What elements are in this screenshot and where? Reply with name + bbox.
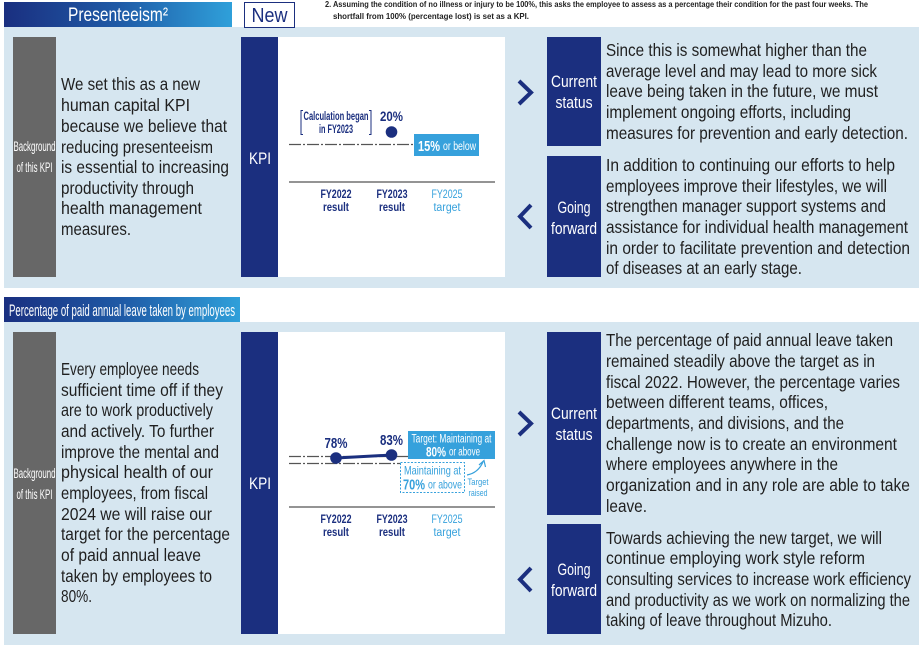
chart: paid leave KPI: FY2022: [320, 514, 352, 526]
text: going forward: [606, 528, 911, 630]
text: background: employees, from fiscal: [61, 483, 208, 503]
chart: paid leave KPI: FY2025: [432, 514, 462, 526]
text: background: 80%.: [61, 586, 92, 606]
heading: paid annual leave: [4, 297, 240, 322]
text: current status: between different teams, offices,: [606, 392, 828, 412]
text: background: productivity through: [61, 178, 194, 198]
chart: presenteeism KPI: result: [379, 202, 405, 214]
chart: paid leave KPI: FY2023: [376, 514, 408, 526]
previous target box: 70%: Maintaining at: [404, 464, 462, 478]
previous target box: 70%: or above: [428, 478, 462, 492]
label: current status: [547, 332, 601, 515]
footnote: [325, 0, 868, 21]
text: background: [61, 359, 230, 606]
text: going forward: In addition to continuing our efforts to help: [606, 155, 895, 175]
label: background of this KPI: [13, 332, 56, 634]
label: going forward: Going: [558, 560, 590, 579]
text: background: 2024 we will raise our: [61, 504, 212, 524]
previous target box: 70%: 70%: [403, 476, 425, 494]
label: going forward: [547, 524, 601, 634]
text: background: reducing presenteeism: [61, 137, 213, 157]
text: current status: implement ongoing efforts, including: [606, 102, 851, 122]
chart: paid leave KPI: result: [379, 527, 405, 539]
target raised note: raised: [468, 488, 488, 499]
text: background: is essential to increasing: [61, 157, 229, 177]
text: current status: leave being taken in the future, we must: [606, 81, 878, 101]
target box: 80%: or above: [449, 446, 480, 458]
label: going forward: [547, 156, 601, 277]
target box: 80%: [408, 431, 495, 460]
label: going forward: forward: [551, 581, 597, 600]
chart: paid leave KPI: 78%: [324, 436, 348, 452]
text: background: because we believe that: [61, 116, 227, 136]
label: going forward: forward: [551, 219, 597, 238]
text: current status: where employees anywhere in the: [605, 454, 838, 474]
label: background of this KPI: [13, 37, 56, 277]
arrow: left: [520, 205, 531, 228]
chart: presenteeism KPI: Calculation began: [304, 111, 368, 123]
text: current status: [606, 40, 908, 143]
text: going forward: employees improve their lifestyles, we will: [606, 176, 887, 196]
label: KPI: KPI: [249, 474, 271, 493]
heading: Presenteeism: Presenteeism²: [68, 5, 168, 26]
text: background: physical health of our: [61, 462, 213, 482]
chart: paid leave KPI: target: [434, 527, 461, 539]
text: background: human capital KPI: [61, 95, 190, 115]
text: background: target for the percentage: [61, 524, 230, 544]
footnote: shortfall from 100% (percentage lost) is set as a KPI.: [333, 11, 529, 21]
text: background: of paid annual leave: [61, 545, 201, 565]
label: current status: Current: [551, 404, 597, 423]
text: going forward: of diseases at an early stage.: [606, 258, 802, 278]
chart: presenteeism KPI: [278, 37, 505, 277]
target raised note: [467, 460, 489, 499]
text: background: are to work productively: [61, 400, 213, 420]
text: current status: leave.: [606, 496, 647, 516]
text: background: and actively. To further: [61, 421, 214, 441]
text: background: measures.: [61, 219, 131, 239]
arrow: right: [519, 412, 531, 435]
text: going forward: continue employing work style reform: [606, 548, 865, 568]
label: going forward: Going: [558, 198, 590, 217]
text: background: [61, 74, 229, 239]
chart: presenteeism KPI: FY2025: [432, 189, 462, 201]
text: going forward: Towards achieving the new target, we will: [606, 528, 882, 548]
text: going forward: taking of leave throughout Mizuho.: [606, 610, 832, 630]
text: current status: [605, 330, 910, 516]
target box: 80%: 80%: [426, 444, 446, 460]
label: KPI: [241, 332, 278, 634]
target box: 15%: [418, 138, 440, 155]
text: background: Every employee needs: [61, 359, 199, 379]
previous target box: 70%: [400, 462, 464, 494]
text: current status: Since this is somewhat higher than the: [606, 40, 867, 60]
target raised note: Target: [468, 477, 489, 488]
text: current status: remained steadily above the target as in: [606, 351, 875, 371]
arrow: left: [520, 568, 531, 591]
chart: paid leave KPI: result: [323, 527, 349, 539]
text: going forward: [606, 155, 910, 278]
text: background: health management: [61, 198, 202, 218]
label: current status: status: [556, 425, 592, 444]
target box: 80%: Target: Maintaining at: [412, 434, 492, 446]
text: current status: average level and may lead to more sick: [606, 61, 877, 81]
label: background of this KPI: Background: [14, 465, 56, 481]
heading: Presenteeism: [4, 2, 232, 27]
label: background of this KPI: of this KPI: [16, 486, 52, 502]
label: KPI: [241, 37, 278, 277]
label: current status: Current: [551, 72, 597, 91]
text: current status: departments, and divisions, and the: [606, 413, 844, 433]
label: KPI: KPI: [249, 149, 271, 168]
chart: presenteeism KPI: in FY2023: [319, 124, 353, 136]
heading: paid annual leave: Percentage of paid annual leave taken by employees: [9, 301, 235, 320]
panel: paid annual leave: [4, 322, 919, 645]
label: current status: status: [556, 93, 592, 112]
target box: or below: [443, 141, 477, 153]
chart: presenteeism KPI: result: [323, 202, 349, 214]
chart: presenteeism KPI: target: [434, 202, 461, 214]
text: going forward: strengthen manager support systems and: [606, 196, 886, 216]
text: background: We set this as a new: [61, 74, 200, 94]
label: current status: [547, 37, 601, 146]
chart: presenteeism KPI: FY2023: [376, 189, 408, 201]
chart: presenteeism KPI: FY2022: [320, 189, 352, 201]
chart: presenteeism KPI: 20%: [380, 108, 403, 124]
label: background of this KPI: of this KPI: [16, 159, 52, 175]
text: background: taken by employees to: [61, 566, 212, 586]
chart: paid leave KPI: 83%: [380, 433, 403, 449]
target box: [414, 134, 479, 156]
text: background: sufficient time off if they: [61, 380, 223, 400]
chart: paid leave KPI: [278, 332, 505, 634]
badge: New: New: [252, 5, 288, 27]
text: background: improve the mental and: [61, 442, 219, 462]
label: background of this KPI: Background: [14, 138, 56, 154]
panel: presenteeism: [4, 27, 919, 288]
arrow: right: [519, 81, 531, 104]
